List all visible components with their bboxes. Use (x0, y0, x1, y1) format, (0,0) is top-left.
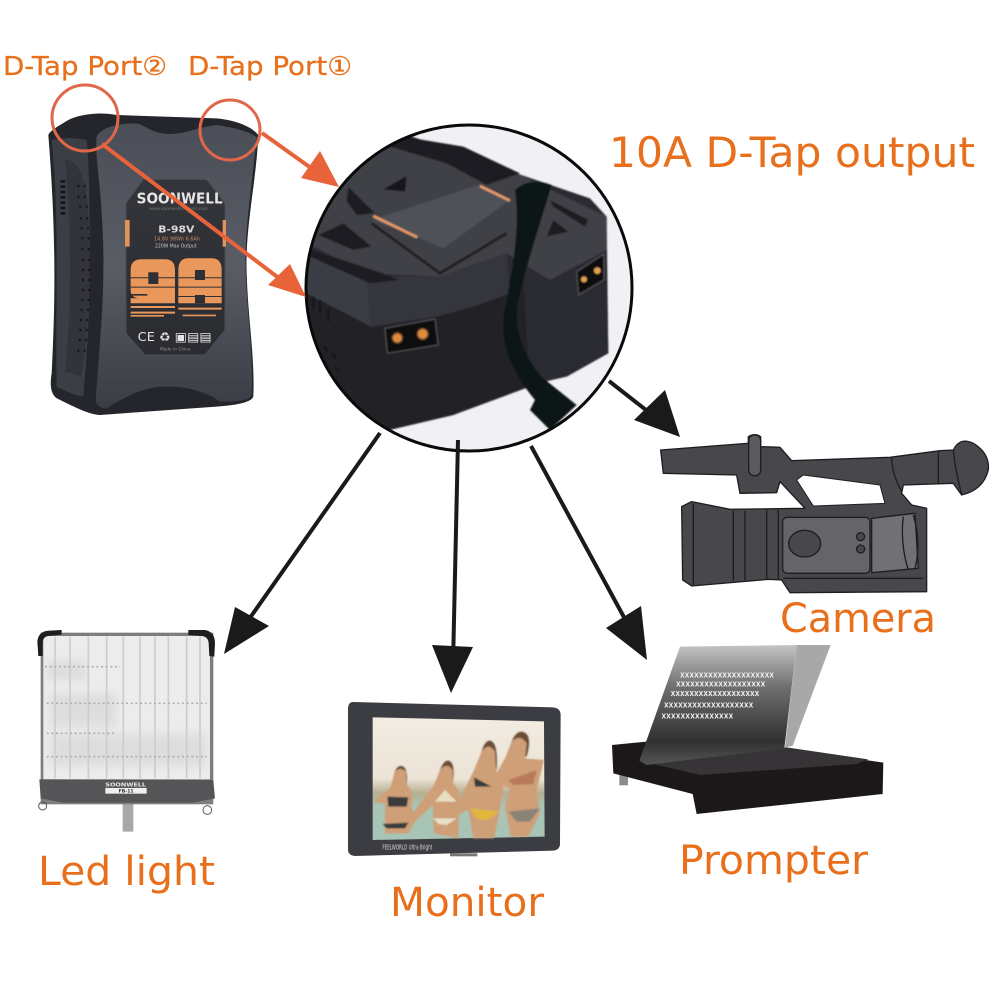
orange 98 graphic (131, 258, 222, 317)
model name: FB-11 (119, 789, 134, 795)
orange arrow to port 1 detail (262, 133, 339, 187)
diffuser grid (45, 637, 207, 778)
arrow to camera (609, 381, 680, 437)
white bikini top (435, 790, 457, 802)
bottom pocket (39, 779, 215, 803)
second button (857, 545, 865, 553)
line 1: xxxxxxxxxxxxxxxxxxxx (680, 670, 774, 681)
mount triangle (383, 176, 407, 192)
bikini bottom (508, 808, 540, 822)
label: prompter: Prompter (679, 838, 869, 884)
mount dark slots (310, 137, 588, 283)
magnified battery circle (297, 125, 632, 451)
made in china: Made in China (160, 347, 191, 353)
cut-outs in 98 (131, 270, 222, 303)
brand name: SOONWELL (105, 783, 146, 789)
magnified right block (560, 250, 609, 376)
rubber cap strap (503, 182, 577, 430)
heading: 10A D-Tap output: 10A D-Tap output (609, 128, 975, 177)
prompter text lines (661, 670, 774, 722)
corner brackets (37, 630, 215, 657)
battery front face (96, 123, 257, 408)
handle strap (749, 435, 761, 476)
white bikini bottom (433, 818, 457, 825)
people on beach (373, 732, 544, 838)
stand clip (450, 853, 477, 856)
arrow to monitor (432, 440, 473, 693)
highlight circle port 1 (200, 100, 260, 160)
certification marks: CE ♻ ▣▤▤ (138, 330, 212, 344)
highlight circle port 2 (52, 85, 118, 151)
base top (643, 747, 868, 775)
stand pole (123, 803, 133, 832)
battery side panel (52, 138, 90, 397)
plate shadow (372, 223, 507, 273)
diffuser mottling (47, 660, 207, 767)
brand name: SOONWELL (137, 190, 223, 207)
battery label plate (126, 179, 225, 355)
magnified silhouette (297, 130, 608, 431)
magnified top deck (300, 140, 607, 280)
label: led light: Led light (38, 849, 215, 895)
skin (373, 738, 544, 838)
display flap (872, 513, 918, 573)
foot (619, 773, 628, 785)
lens port (789, 530, 821, 557)
handle opening (797, 475, 885, 506)
port 2 socket (385, 319, 438, 353)
port 2 pins (392, 329, 428, 343)
arrow to prompter (531, 446, 647, 660)
mount plate (372, 185, 510, 248)
line 5: xxxxxxxxxxxxxxx (661, 711, 734, 722)
hanging rings (39, 802, 212, 814)
vent dots (62, 180, 94, 351)
monitor (348, 702, 561, 856)
port label 2: D-Tap Port② (3, 52, 167, 82)
brand text: FEELWORLD Ultra Bright (382, 844, 433, 852)
screen (373, 717, 545, 840)
website: www.soonwellvmount.com (149, 206, 208, 212)
line 3: xxxxxxxxxxxxxxxxxxx (671, 688, 760, 699)
orange strips (373, 186, 510, 237)
base (612, 742, 883, 814)
buttons (857, 533, 865, 541)
model name: B-98V (158, 224, 195, 235)
frame (41, 633, 213, 804)
port 1 socket (577, 254, 604, 295)
arrow to led light (224, 433, 380, 654)
vent dots (313, 297, 340, 372)
battery side grip (65, 160, 89, 377)
magnified upper left block (308, 252, 370, 326)
magnifier outline (306, 125, 632, 451)
battery photo (48, 113, 258, 415)
monitor body (348, 702, 561, 856)
line 2: xxxxxxxxxxxxxxxxxxx (676, 679, 766, 690)
glass (639, 645, 797, 765)
magnified centre block (367, 253, 510, 327)
brand strip (105, 788, 147, 794)
line 4: xxxxxxxxxxxxxxxxxxx (664, 699, 754, 710)
prompter (612, 645, 883, 814)
camera icon (661, 435, 988, 593)
swimwear (383, 777, 492, 828)
spec lines: 14.8V 98Wh 6.6Ah (154, 237, 200, 243)
orange arrow to port 2 detail (102, 144, 306, 297)
max output: 220W Max Output (155, 244, 197, 250)
magnified lower body (297, 277, 530, 431)
handle and viewfinder (661, 435, 988, 593)
port 1 pins (581, 267, 601, 282)
side panel (783, 517, 870, 573)
yellow bikini (470, 808, 499, 821)
lens rings (693, 450, 962, 585)
hood back (785, 645, 831, 747)
diffuser (43, 636, 210, 779)
label: monitor: Monitor (390, 880, 545, 926)
side tabs (125, 220, 226, 247)
hair (393, 732, 529, 785)
port label 1: D-Tap Port① (188, 52, 352, 82)
label: camera: Camera (780, 596, 936, 642)
pink bikini top (508, 770, 537, 785)
battery body (48, 113, 258, 415)
led light panel (37, 630, 215, 832)
